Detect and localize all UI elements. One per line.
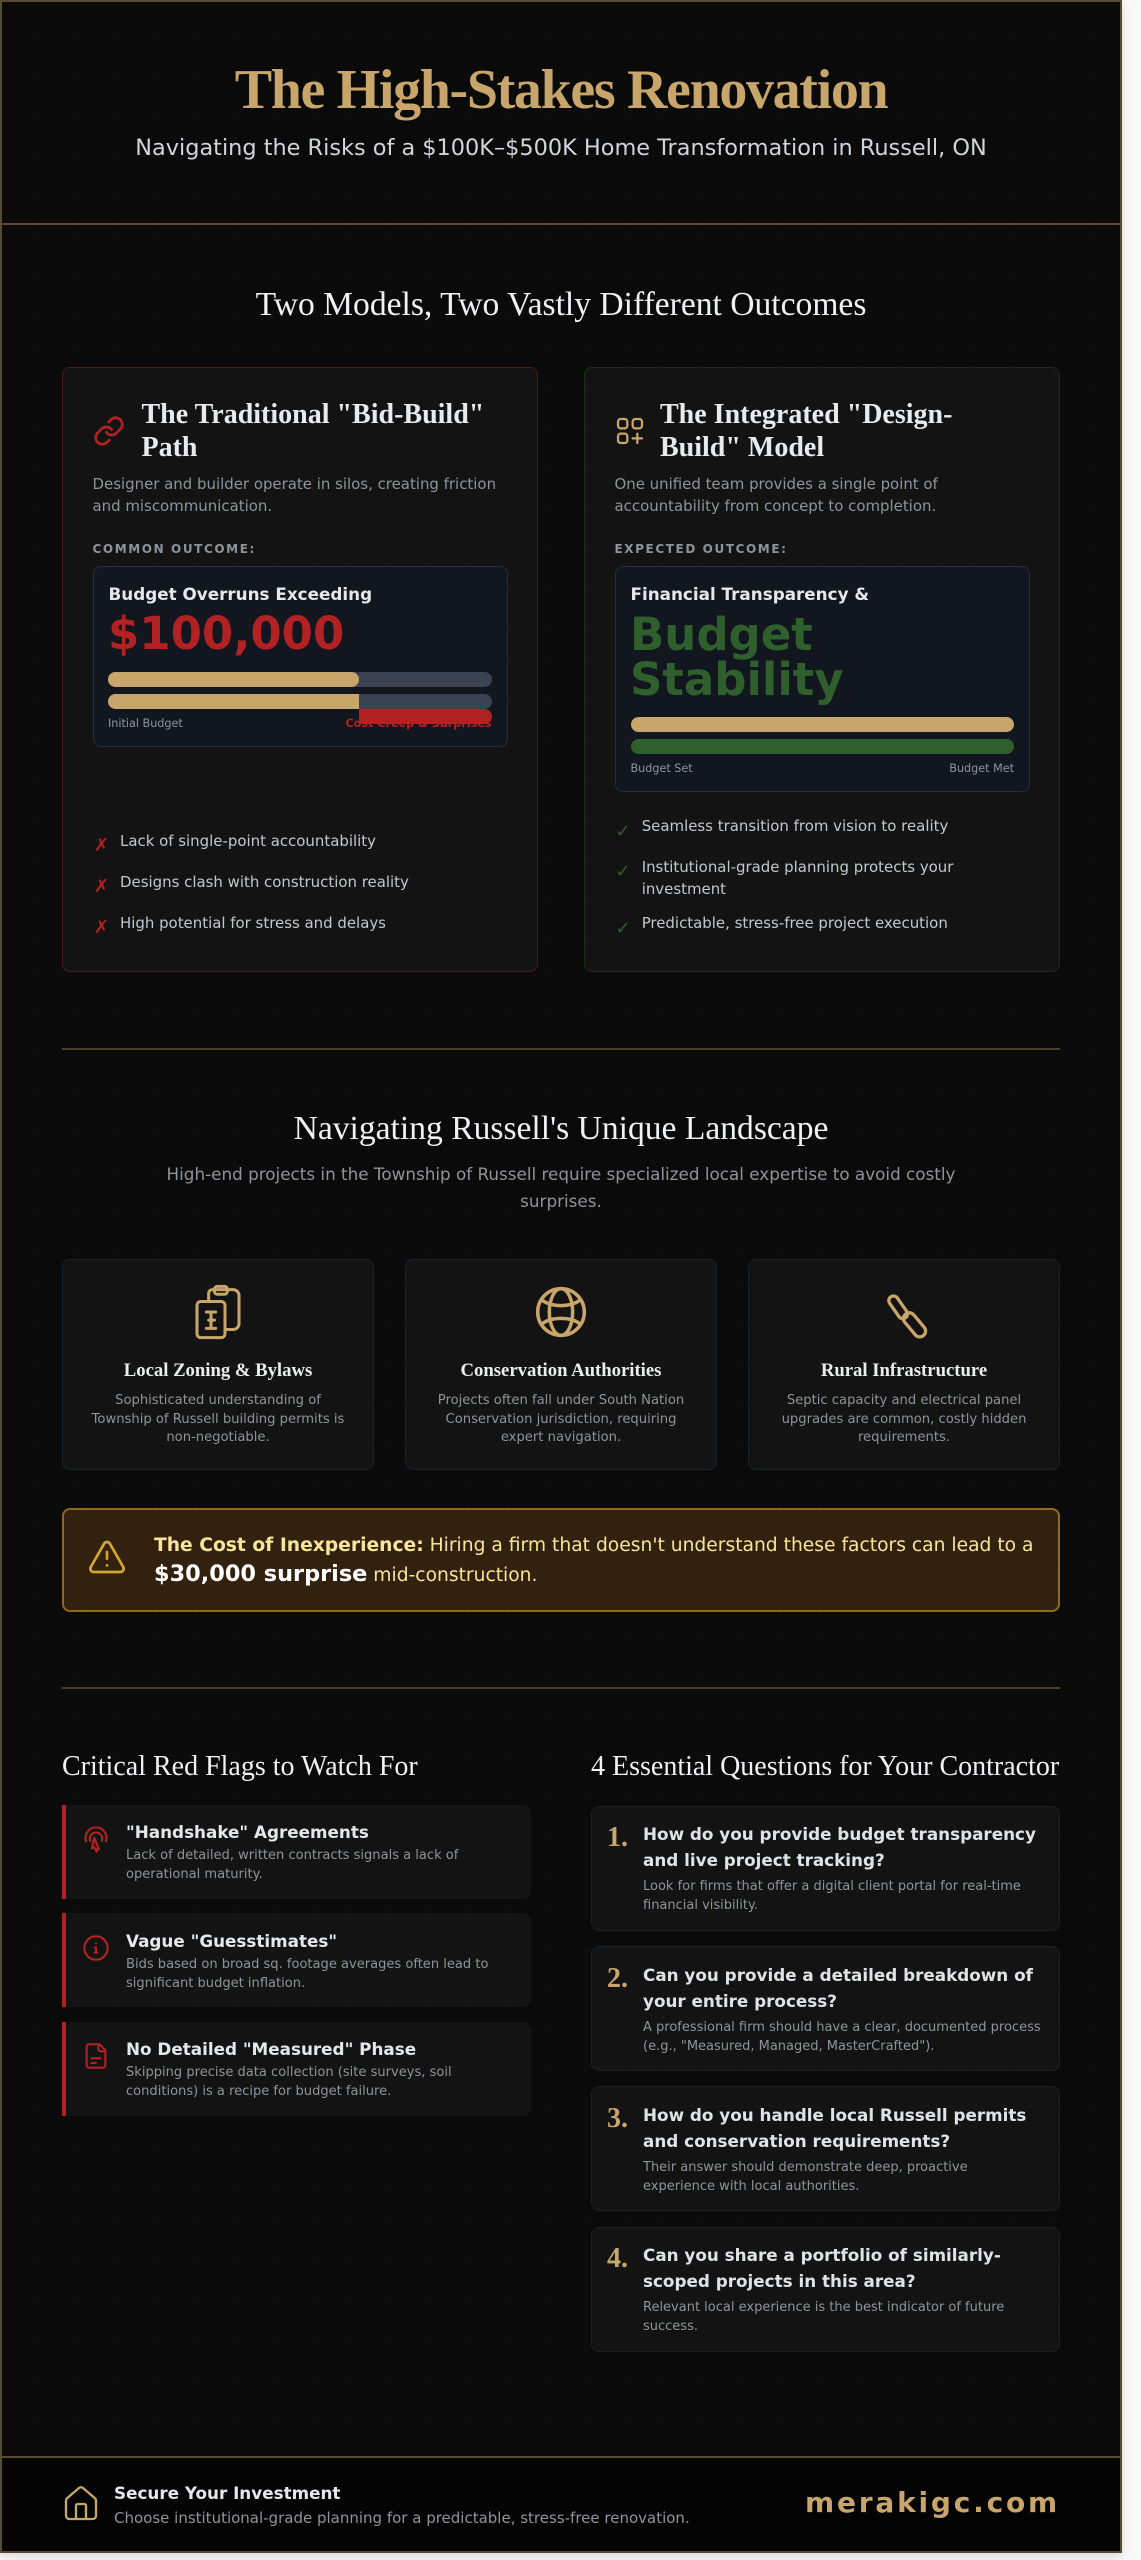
heading: red flags: Critical Red Flags to Watch For [62, 1751, 418, 1782]
header: subtitle: Navigating the Risks of a $100K–$500K Home Transformation in Russell, ON [135, 135, 987, 161]
card text [92, 1393, 344, 1445]
question: and conservation requirements? [643, 2131, 950, 2151]
icon: document [86, 2043, 106, 2069]
question [643, 1965, 1034, 2011]
question: How do you handle local Russell permits [643, 2105, 1026, 2125]
flag text: significant budget inflation. [126, 1976, 305, 1990]
number: 1. [607, 1822, 628, 1853]
negatives list: Designs clash with construction reality [120, 873, 409, 891]
flag text: Lack of detailed, written contracts signals a lack of [126, 1848, 458, 1863]
flag text: operational maturity. [126, 1866, 263, 1882]
number: 4. [607, 2243, 628, 2274]
positives list: ✓ [616, 918, 631, 939]
section heading: russell landscape: Navigating Russell's Unique Landscape [294, 1110, 828, 1147]
question: How do you provide budget transparency [643, 1824, 1036, 1844]
guidance: success. [643, 2319, 698, 2334]
question: your entire process? [643, 1991, 837, 2011]
question [643, 2105, 1026, 2151]
bar label: budget met: Budget Met [949, 762, 1014, 775]
question [643, 2245, 1001, 2291]
panel heading: The Traditional "Bid-Build" [142, 398, 484, 430]
panel: local zoning [62, 1259, 374, 1470]
bar: actual with overrun [108, 694, 492, 730]
positives list: ✓ [616, 861, 631, 882]
card text: expert navigation. [501, 1430, 621, 1445]
negatives list: ✗ [94, 876, 109, 897]
panel heading [142, 398, 484, 463]
guidance: Relevant local experience is the best indicator of future [643, 2300, 1004, 2315]
icon: clipboard [196, 1284, 240, 1340]
panel: traditional bid-build [62, 367, 538, 972]
section intro: surprises. [520, 1190, 602, 1210]
panel description [92, 475, 496, 515]
outcome label: EXPECTED OUTCOME: [614, 542, 788, 556]
website: merakigc.com [805, 2486, 1060, 2519]
icon: globe [536, 1286, 586, 1338]
bar: budget met [630, 739, 1014, 754]
icon: blocks [616, 418, 644, 444]
outcome headline: Stability [630, 653, 844, 706]
number: 2. [607, 1962, 628, 1994]
flag: vague guesstimates [62, 1913, 531, 2007]
card text: Township of Russell building permits is [92, 1412, 344, 1427]
question: Can you provide a detailed breakdown of [643, 1965, 1033, 1985]
panel description: One unified team provides a single point of [614, 475, 938, 493]
guidance [643, 2300, 1004, 2334]
flag title: Vague "Guesstimates" [126, 1931, 337, 1951]
flag: no measured phase [62, 2022, 531, 2116]
positives list: ✓ [616, 821, 631, 842]
question 2 [591, 1946, 1060, 2071]
card text: Conservation jurisdiction, requiring [446, 1412, 676, 1427]
panel description [614, 475, 938, 515]
guidance [643, 2020, 1041, 2054]
card text: Projects often fall under South Nation [438, 1393, 684, 1408]
question: and live project tracking? [643, 1850, 885, 1870]
question 1 [591, 1806, 1060, 1930]
guidance: financial visibility. [643, 1898, 758, 1913]
flag text: Skipping precise data collection (site surveys, soil [126, 2065, 452, 2080]
question 3 [591, 2086, 1060, 2211]
panel heading [660, 398, 952, 463]
guidance [642, 2160, 968, 2194]
bar: budget set [630, 716, 1014, 732]
panel: conservation authorities [405, 1259, 717, 1470]
section intro [167, 1164, 955, 1210]
icon: wrench [887, 1294, 928, 1338]
guidance [643, 1879, 1021, 1913]
negatives list: ✗ [94, 917, 109, 938]
outcome title: Financial Transparency & [630, 584, 869, 604]
footer heading: Secure Your Investment [114, 2483, 340, 2503]
icon: info [83, 1935, 109, 1961]
panel description: accountability from concept to completion. [614, 497, 936, 515]
panel heading: Path [142, 432, 198, 463]
card text [438, 1393, 684, 1445]
question: scoped projects in this area? [643, 2271, 916, 2291]
panel description: Designer and builder operate in silos, creating friction [92, 475, 496, 493]
guidance: A professional firm should have a clear, documented process [643, 2020, 1041, 2034]
card title: Conservation Authorities [461, 1360, 661, 1381]
guidance: Look for firms that offer a digital client portal for real-time [643, 1879, 1021, 1894]
footer [0, 2456, 1122, 2553]
flag: handshake agreements [62, 1805, 531, 1899]
guidance: experience with local authorities. [643, 2178, 859, 2194]
bar label: cost creep: Cost Creep & Surprises [345, 717, 492, 730]
header: title: The High-Stakes Renovation [235, 59, 887, 121]
card title: Rural Infrastructure [821, 1360, 987, 1381]
flag title: No Detailed "Measured" Phase [126, 2039, 416, 2059]
positives list: Predictable, stress-free project execution [642, 914, 948, 932]
section intro: High-end projects in the Township of Russell require specialized local expertise to avoid costly [167, 1164, 955, 1184]
question 4 [591, 2226, 1060, 2352]
flag text: Bids based on broad sq. footage averages often lead to [126, 1957, 488, 1972]
callout: cost of inexperience [62, 1508, 1060, 1612]
question: Can you share a portfolio of similarly- [643, 2245, 1001, 2265]
panel description: and miscommunication. [92, 497, 272, 515]
bar label: budget set: Budget Set [630, 762, 693, 775]
icon: broken link [94, 416, 124, 446]
card text: upgrades are common, costly hidden [782, 1412, 1026, 1427]
card text: Sophisticated understanding of [115, 1393, 321, 1408]
section heading: two models: Two Models, Two Vastly Different Outcomes [256, 286, 866, 323]
panel: integrated design-build [584, 367, 1060, 972]
flag text [126, 2065, 452, 2098]
negatives list: High potential for stress and delays [120, 914, 386, 932]
outcome title: Budget Overruns Exceeding [108, 584, 372, 604]
positives list: investment [642, 880, 726, 898]
panel: rural infrastructure [748, 1259, 1060, 1470]
flag text [126, 1957, 488, 1990]
icon: pointer signal [84, 1826, 108, 1853]
icon: warning triangle [89, 1540, 125, 1574]
negatives list [94, 832, 409, 938]
negatives list: ✗ [94, 835, 109, 856]
outcome box: budget overruns [93, 566, 508, 747]
outcome headline: Budget [630, 608, 813, 661]
callout figure: $30,000 surprise mid-construction. [154, 1561, 537, 1587]
panel heading: Build" Model [660, 432, 824, 463]
heading: essential questions: 4 Essential Questions for Your Contractor [591, 1751, 1059, 1782]
outcome headline [630, 608, 844, 706]
callout text: The Cost of Inexperience: Hiring a firm that doesn't understand these factors can lead to a [154, 1535, 1034, 1556]
footer text: Choose institutional-grade planning for a predictable, stress-free renovation. [114, 2508, 690, 2526]
icon: house [64, 2486, 98, 2520]
outcome amount: $100,000 [108, 607, 344, 660]
card text: Septic capacity and electrical panel [787, 1393, 1021, 1408]
bar label: initial budget: Initial Budget [108, 717, 183, 730]
outcome label: COMMON OUTCOME: [92, 542, 256, 556]
card text: non-negotiable. [166, 1430, 270, 1445]
outcome box: budget stability [614, 566, 1030, 792]
guidance: (e.g., "Measured, Managed, MasterCrafted"). [643, 2038, 934, 2054]
positives list [616, 817, 954, 939]
card title: Local Zoning & Bylaws [124, 1360, 312, 1381]
card text: requirements. [858, 1430, 950, 1445]
flag title: "Handshake" Agreements [126, 1822, 369, 1842]
panel heading: The Integrated "Design- [660, 398, 952, 430]
number: 3. [607, 2102, 628, 2134]
guidance: Their answer should demonstrate deep, proactive [643, 2160, 968, 2174]
question [643, 1824, 1036, 1870]
bar: initial budget [108, 672, 492, 687]
flag text: conditions) is a recipe for budget failure. [126, 2084, 391, 2098]
card text [782, 1393, 1026, 1445]
positives list: Institutional-grade planning protects your [642, 858, 953, 876]
flag text [126, 1848, 459, 1882]
positives list: Seamless transition from vision to reality [642, 817, 948, 835]
negatives list: Lack of single-point accountability [120, 832, 376, 850]
